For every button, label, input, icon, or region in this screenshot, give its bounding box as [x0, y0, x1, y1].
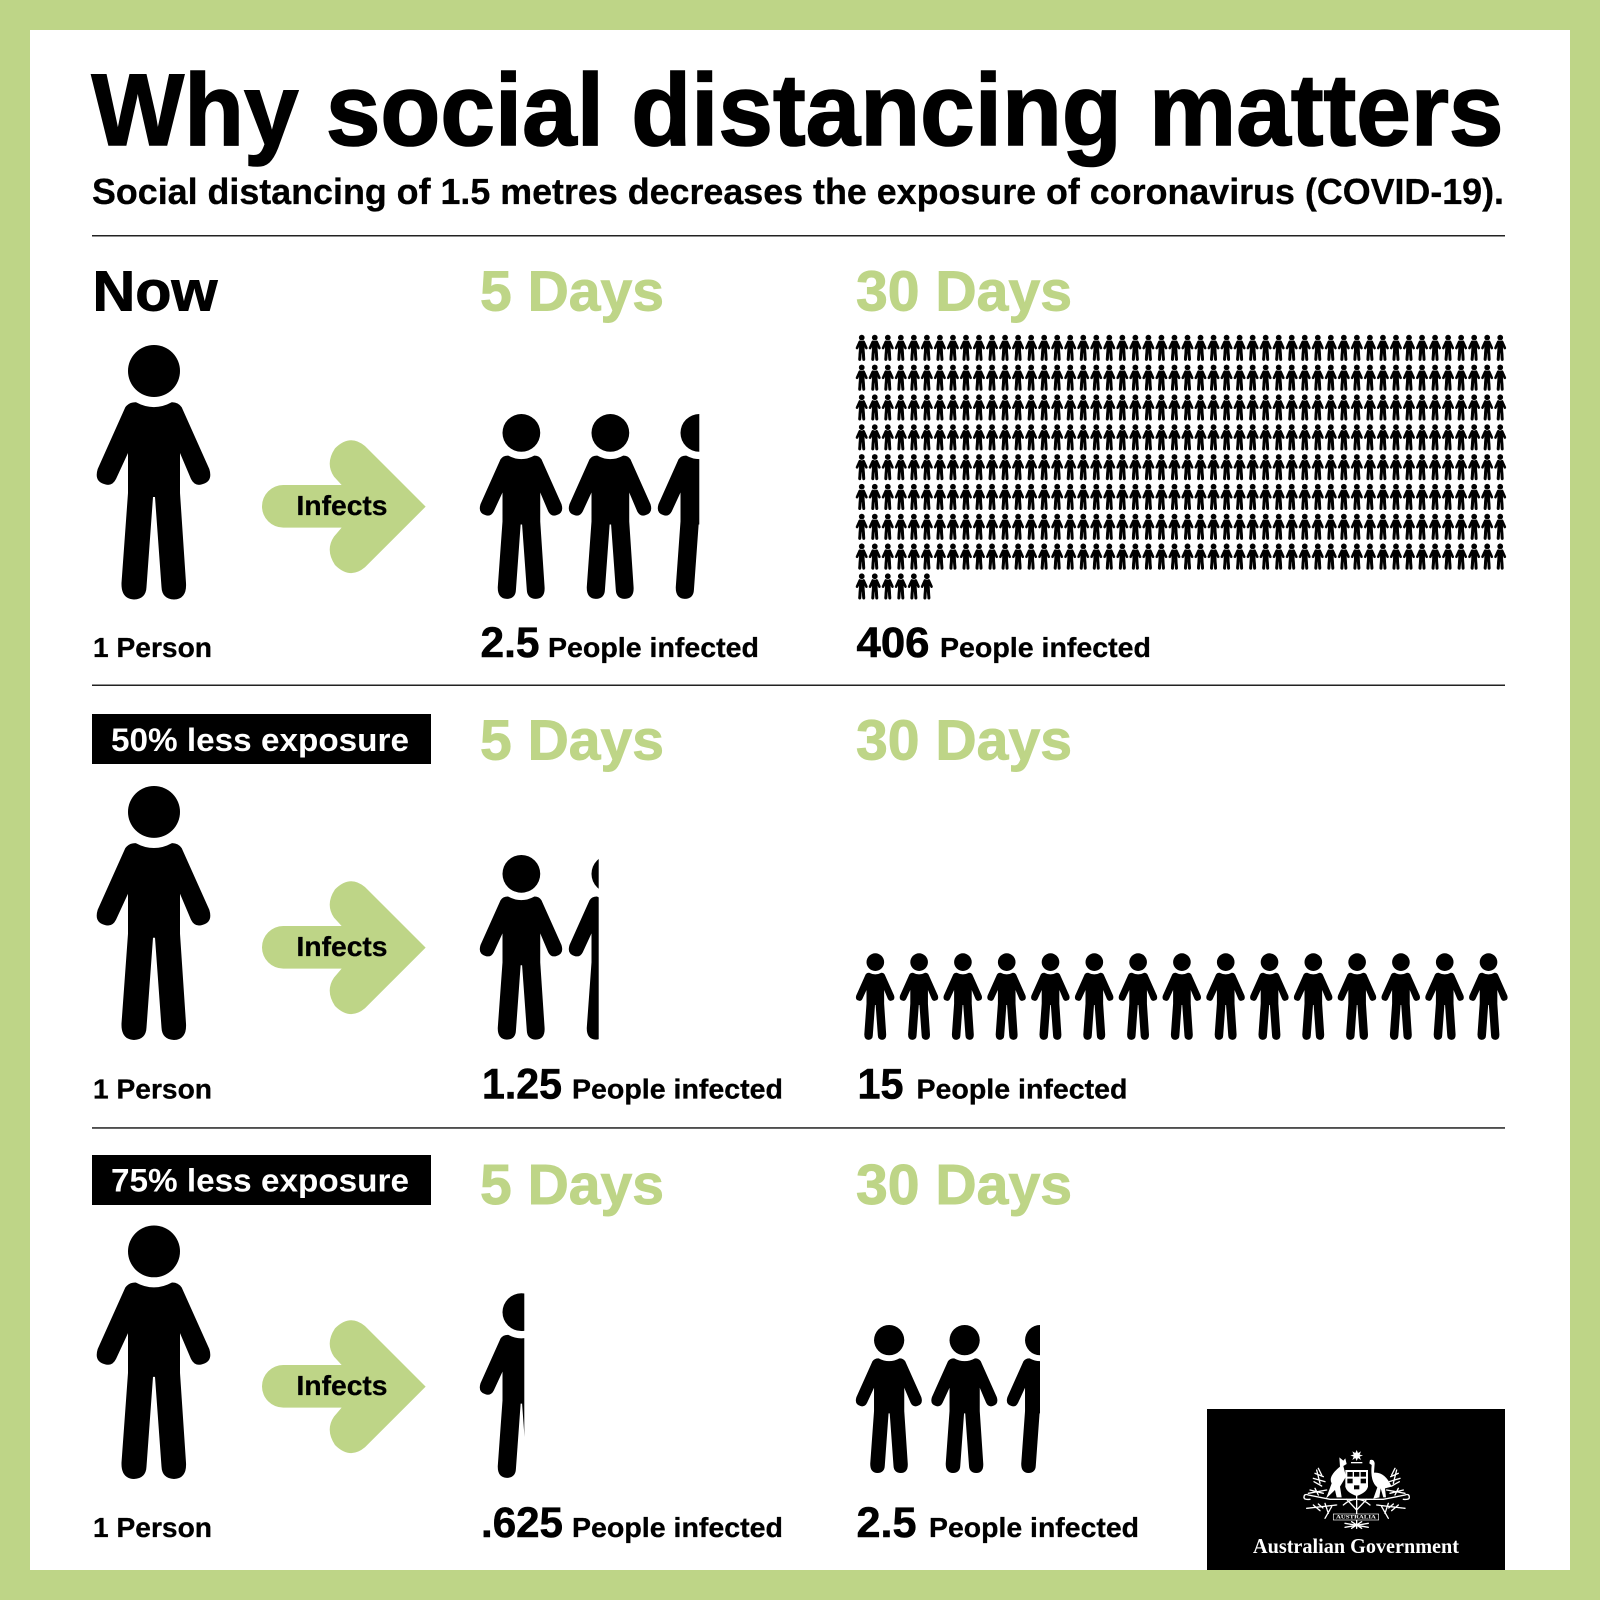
stat: 406 people infected: 406 — [856, 619, 930, 667]
icons: 2.5 people — [480, 414, 700, 599]
panel: 75% less exposure — [92, 1153, 1139, 1547]
icons: 406 people grid — [856, 335, 1506, 599]
heading: 30 days: 30 Days — [856, 260, 1072, 324]
stat: .625 people infected: People infected — [572, 1512, 783, 1543]
label: 1 person: 1 Person — [93, 1074, 212, 1104]
heading: 30 days: 30 Days — [856, 708, 1072, 772]
stat: 2.5 people infected: 2.5 — [480, 619, 540, 667]
arrow: infects — [262, 440, 426, 573]
badge: 50% less exposure: 50% less exposure — [111, 722, 409, 758]
heading: 5 days: 5 Days — [480, 1153, 664, 1217]
stat: 15 people infected — [858, 1060, 1128, 1108]
arrow: infects: Infects — [296, 931, 388, 962]
arrow: infects — [262, 1320, 426, 1453]
badge: 50% less exposure — [92, 714, 431, 764]
stat: 406 people infected — [856, 619, 1151, 667]
badge: 75% less exposure: 75% less exposure — [111, 1163, 409, 1199]
heading: 5 days: 5 Days — [480, 260, 664, 324]
stat: .625 people infected — [481, 1499, 783, 1547]
panel: now — [92, 260, 1506, 667]
subtitle: Social distancing of 1.5 metres decreases the exposure of coronavirus (COVID-19). — [92, 171, 1504, 212]
stat: 1.25 people infected: People infected — [572, 1074, 783, 1104]
arrow: infects: Infects — [296, 490, 388, 521]
icon: source person — [97, 1226, 210, 1479]
label: 1 person: 1 Person — [93, 632, 212, 663]
stat: 1.25 people infected: 1.25 — [482, 1060, 562, 1108]
arrow: infects — [262, 881, 426, 1014]
logo panel: Australian Government — [1207, 1409, 1505, 1570]
icons: 15 people — [856, 953, 1508, 1040]
stat: 15 people infected: People infected — [916, 1074, 1128, 1104]
arrow: infects: Infects — [296, 1370, 388, 1401]
stat: 15 people infected: 15 — [858, 1060, 904, 1108]
stat: 2.5 people infected — [480, 619, 759, 667]
icon: source person — [97, 786, 210, 1040]
badge: 75% less exposure — [92, 1155, 431, 1205]
icons: 2.5 people — [856, 1325, 1040, 1473]
icon: coat of arms — [1304, 1450, 1409, 1528]
stat: 2.5 people infected — [856, 1499, 1139, 1547]
stat: 2.5 people infected: People infected — [929, 1512, 1139, 1543]
stat: 2.5 people infected: 2.5 — [856, 1499, 916, 1547]
heading: now: Now — [92, 260, 218, 324]
icon: source person — [97, 345, 210, 600]
stat: .625 people infected: .625 — [481, 1499, 563, 1547]
stat: 2.5 people infected: People infected — [548, 632, 759, 663]
label: 1 person: 1 Person — [93, 1512, 212, 1543]
icons: .625 people — [480, 1293, 524, 1478]
stat: 1.25 people infected — [482, 1060, 783, 1108]
icons: 1.25 people — [480, 855, 599, 1040]
title: Why social distancing matters — [92, 53, 1504, 167]
stat: 406 people infected: People infected — [940, 632, 1151, 663]
text: Australian Government: Australian Government — [1253, 1534, 1459, 1558]
heading: 5 days: 5 Days — [480, 708, 664, 772]
text: Australia ribbon: AUSTRALIA — [1336, 1516, 1377, 1521]
heading: 30 days: 30 Days — [856, 1153, 1072, 1217]
panel: 50% less exposure — [92, 708, 1508, 1108]
